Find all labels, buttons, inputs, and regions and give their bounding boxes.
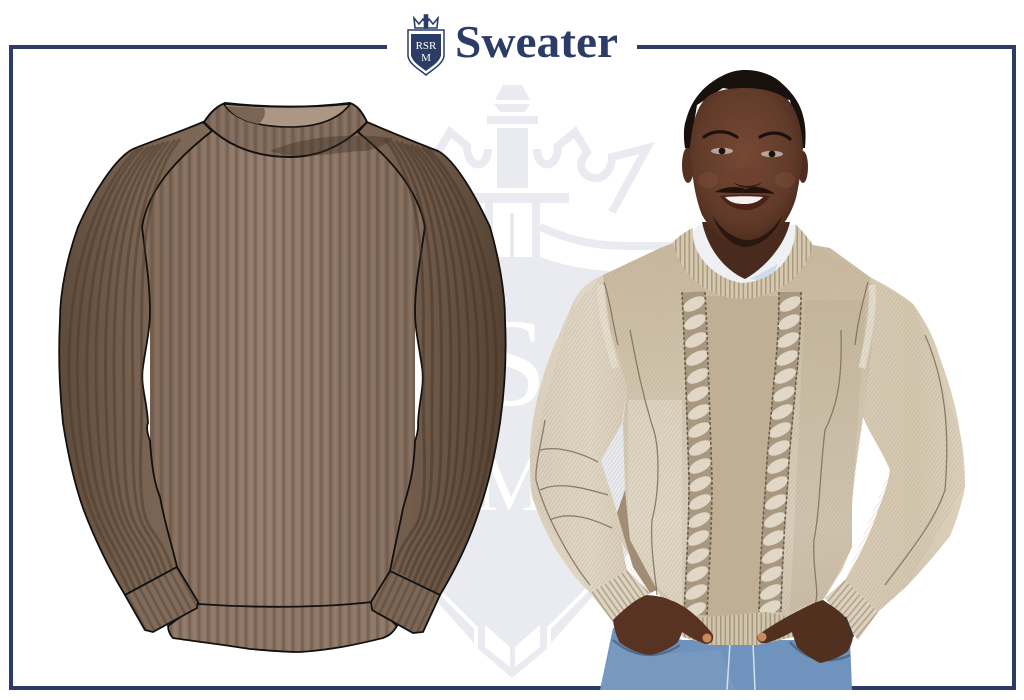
logo crown [414,15,438,28]
watermark: brand crest [340,85,690,678]
logo letter M: M [421,52,431,64]
raglan highlights [601,285,872,368]
right cuff of man [825,580,878,640]
sweater hem [168,602,397,652]
watermark: crest shield [385,257,640,678]
mustache [715,187,775,194]
right cable braid [757,292,803,619]
nose [730,168,765,184]
watermark: shield inner lines [437,589,588,652]
sweater collar [204,103,367,157]
face [690,88,803,247]
center panel [705,296,783,622]
left cable braid [681,292,713,621]
shadow at left hip [617,490,657,593]
sweater hem of man [683,612,795,645]
nostril shadow [733,182,762,188]
pale left chest panel [628,400,682,610]
seams and folds [536,282,947,605]
shirt [690,225,799,288]
sweater neckband [673,224,813,299]
chin beard [712,215,782,247]
logo letters: RSR [416,40,437,52]
title: Sweater [455,16,618,67]
smile [720,194,770,210]
sweater body [140,118,430,613]
left sleeve of man [530,275,640,593]
left hand [613,595,713,655]
watermark: letter S: S [477,295,547,433]
ear left [682,147,694,183]
torso [603,243,872,645]
neck [702,222,790,279]
left cuff [125,567,198,632]
left cuff of man [590,570,650,622]
collar opening [224,104,350,127]
right sleeve of man [845,277,965,612]
right cuff [371,571,440,633]
collar opening shadow [226,106,265,124]
eyes [711,148,783,157]
right hand [757,600,853,663]
knit texture [530,243,965,645]
illustration: ribbed sweater [59,103,506,652]
left sleeve ribs [69,139,180,592]
darker right chest panel [790,300,866,612]
right sleeve ribs [385,139,496,592]
watch strap [845,617,853,637]
watermark: crown and arcs [340,132,690,246]
photo: man wearing cable-knit sweater [530,70,965,690]
sweater silhouette backing [140,300,425,460]
jeans [600,628,852,690]
logo [408,15,444,75]
watermark: lower shield panels [485,625,540,667]
watermark: tower and sword guard [468,85,569,257]
shirt button placket [750,264,778,282]
eyebrows [704,132,790,139]
logo shield [408,30,444,75]
right sleeve [358,122,506,595]
watermark: second letter: S [548,295,618,433]
left sleeve [59,122,212,595]
watermark: lower letter: M [476,440,547,528]
collar shadow on chest [270,136,393,156]
hair [684,70,806,148]
cheek highlights [698,172,795,188]
ear right [798,151,808,183]
